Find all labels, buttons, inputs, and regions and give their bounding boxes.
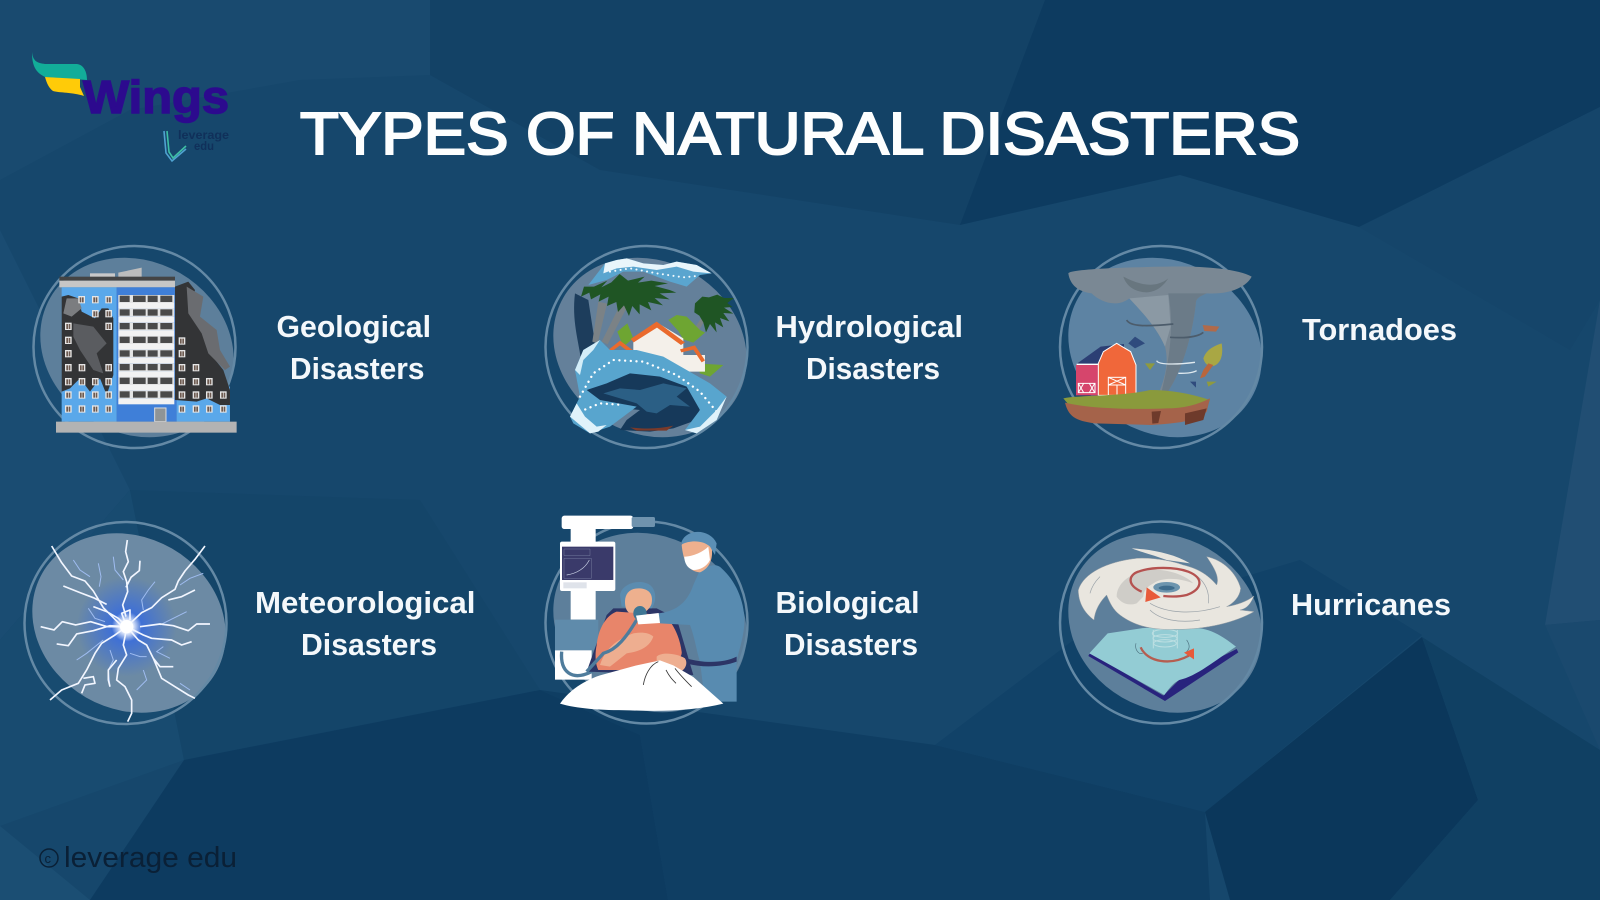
icon: tsunami wave and house [570,258,734,433]
disc and ring [7,223,267,472]
top wave crest [588,258,712,287]
icon: tornado and barn [1063,267,1252,425]
label: Meteorological Disasters: Disasters [301,627,437,662]
label: Geological Disasters: Disasters [290,351,424,386]
footer: copyright leverage edu: leverage edu [64,842,237,874]
logo: Wings by leverage edu: edu [194,139,214,153]
dark wave swirl [587,370,702,432]
main breaking wave [570,340,727,433]
panel: meteorological disasters [0,499,475,747]
disc and ring [520,223,780,472]
title: TYPES OF NATURAL DISASTERS [300,101,1300,167]
label: Biological Disasters: Biological [776,585,920,620]
label: Meteorological Disasters [255,585,476,662]
label: Meteorological Disasters: Meteorological [255,585,476,620]
logo: Wings by leverage edu: Wings [83,71,229,123]
label: Tornadoes: Tornadoes [1302,312,1457,347]
disc and ring [0,499,259,747]
panel: hydrological disasters [520,223,963,472]
footer: copyright leverage edu: c [44,851,52,866]
logo: Wings by leverage edu: leverage [178,128,229,142]
label: Geological Disasters: Geological [276,309,431,344]
logo: Wings by leverage edu [32,52,229,161]
label: Hurricanes: Hurricanes [1291,587,1451,622]
label: Hydrological Disasters [776,309,963,386]
panel: geological disasters [7,223,431,472]
icon: damaged building [56,268,237,433]
label: Geological Disasters [276,309,431,386]
label: Biological Disasters [776,585,920,662]
icon: patient with doctor and monitor [555,516,744,711]
disc and ring [1035,499,1295,747]
disc and ring [520,498,780,747]
panel: biological disasters [520,498,920,747]
icon: hurricane structure [1078,548,1254,701]
disc and ring [1035,223,1295,472]
label: Hydrological Disasters: Hydrological [776,309,963,344]
panel: tornadoes [1035,223,1457,472]
panel: hurricanes [1035,499,1451,747]
label: Biological Disasters: Disasters [784,627,918,662]
label: Hydrological Disasters: Disasters [806,351,940,386]
icon: lightning [41,540,210,722]
